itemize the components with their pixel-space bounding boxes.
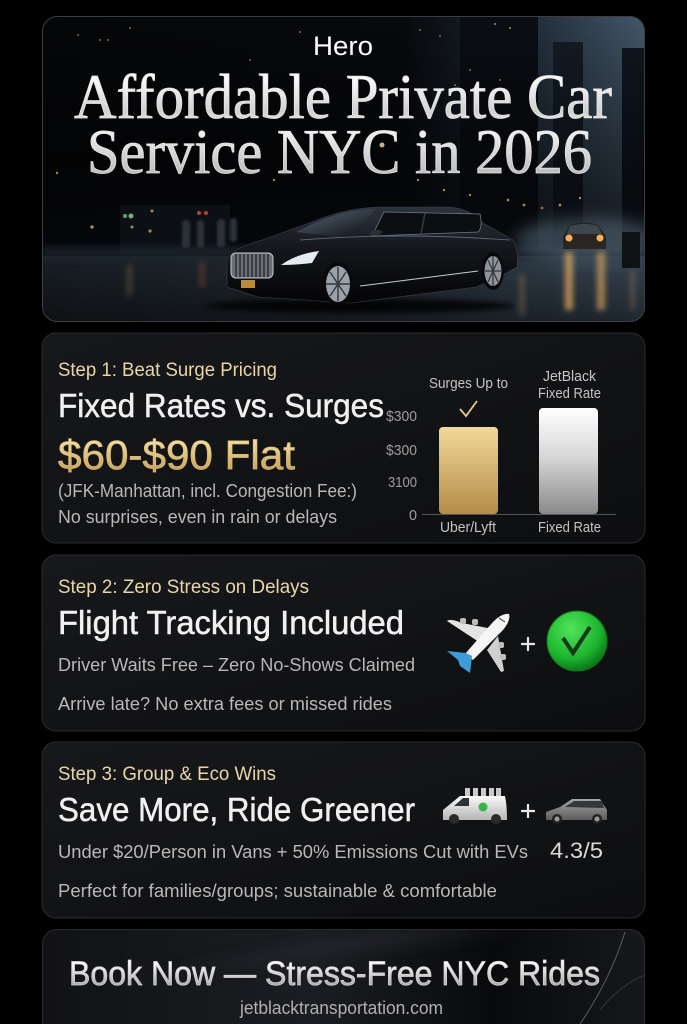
panel: step 3 [42, 742, 645, 918]
JetBlack label: JetBlack [543, 368, 596, 385]
distant car [563, 222, 606, 249]
y axis labels: 0 [409, 507, 417, 524]
panel: call to action [42, 929, 645, 1024]
savings text: Under $20/Person in Vans + 50% Emissions Cut with EVs [58, 841, 528, 862]
y axis labels [386, 408, 417, 524]
website: jetblacktransportation.com [239, 998, 443, 1018]
icon: check mark [460, 401, 477, 416]
y axis labels: $300 [386, 408, 417, 425]
hero title: Service NYC in 2026 [87, 116, 592, 187]
JetBlack label [538, 368, 601, 402]
hero border [42, 16, 644, 322]
limousine [227, 207, 518, 306]
icon: green check [547, 611, 607, 671]
no surprises note: No surprises, even in rain or delays [58, 506, 337, 527]
step 2 label: Step 2: Zero Stress on Delays [58, 576, 309, 598]
JetBlack label: Fixed Rate [538, 385, 601, 402]
step 3 heading: Save More, Ride Greener [58, 792, 415, 829]
plus sign [521, 804, 535, 818]
hero title [74, 61, 612, 187]
panel: step 2 [42, 555, 645, 731]
bar chart [386, 368, 616, 536]
icon: van [443, 788, 507, 824]
step 1 label: Step 1: Beat Surge Pricing [58, 359, 277, 381]
y axis labels: $300 [386, 442, 417, 459]
x label fixed rate: Fixed Rate [538, 519, 601, 536]
y axis labels: 3100 [388, 474, 417, 491]
step 2 heading: Flight Tracking Included [58, 605, 404, 642]
headlight [281, 251, 319, 265]
grille [231, 253, 273, 278]
front wheel [326, 262, 350, 303]
pedestrians [182, 218, 237, 248]
street bin [622, 232, 640, 268]
rear wheel [482, 252, 504, 290]
rating: 4.3/5 [550, 838, 603, 863]
driver waits text: Driver Waits Free – Zero No-Shows Claimed [58, 654, 415, 675]
price: $60-$90 Flat [58, 432, 296, 478]
license plate [241, 280, 255, 288]
arrive late text: Arrive late? No extra fees or missed rides [58, 693, 392, 714]
surge label: Surges Up to [429, 375, 508, 392]
price note: (JFK-Manhattan, incl. Congestion Fee:) [58, 480, 357, 501]
call to action heading: Book Now — Stress-Free NYC Rides [69, 955, 600, 993]
hero eyebrow: Hero [313, 31, 373, 61]
road reflections [128, 252, 635, 315]
bar: Uber/Lyft [439, 427, 498, 514]
icon: airplane [447, 614, 509, 673]
bar: fixed rate [539, 408, 598, 514]
step 3 label: Step 3: Group & Eco Wins [58, 763, 276, 785]
hero city background [42, 16, 645, 322]
plus sign [521, 637, 535, 651]
step 1 heading: Fixed Rates vs. Surges [58, 388, 384, 425]
hero wet road [42, 218, 665, 322]
panel: step 1 [42, 333, 645, 543]
x label Uber/Lyft: Uber/Lyft [440, 519, 497, 536]
hero title: Affordable Private Car [74, 61, 612, 132]
icon: electric car [546, 799, 607, 824]
city lights [56, 23, 581, 233]
panel: hero [42, 16, 665, 322]
perfect for text: Perfect for families/groups; sustainable & comfortable [58, 880, 497, 901]
